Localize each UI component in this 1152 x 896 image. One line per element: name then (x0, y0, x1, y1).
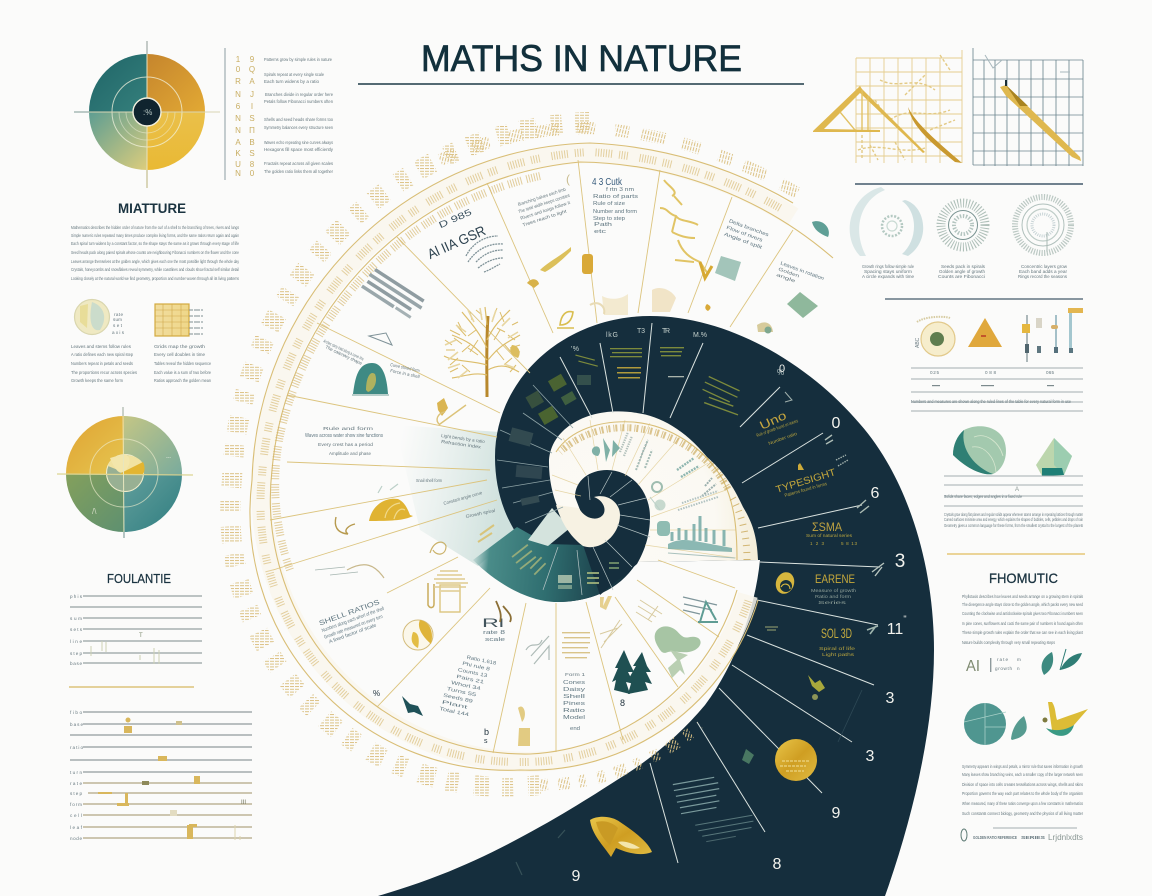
chart: lower rule list: ratio (70, 745, 83, 750)
panel content: top panels text: Ratio of parts (593, 194, 639, 200)
panel text: mist panel marks: Growth spiral (465, 508, 496, 519)
chart: lower rule list: cell (70, 813, 82, 818)
text block: small columns: Each value is a sum of two before (154, 370, 211, 375)
rings: outer glyph clusters (230, 122, 797, 787)
legend: gold glyph columns: I (251, 102, 253, 111)
heading: left lower: FOULANTIE (107, 571, 171, 586)
panel content: top panels text: ( (566, 172, 570, 186)
dark panels: green and pale glyphs: T3 (637, 328, 645, 335)
chart: upper rule list: T (139, 633, 143, 639)
text block: left upper paragraph: Leaves arrange themselves at the golden angle, which gives each one the most possible light through the whole day (71, 259, 239, 264)
numbers: dark band scale: 3 (895, 551, 905, 572)
icon row: AI label and leaves: growth (995, 666, 1012, 671)
legend: gold glyph columns: 1 (236, 55, 241, 64)
panel content: top right text and swatches: Flow of rivers (725, 225, 764, 244)
panel content: gold river branches (660, 180, 712, 278)
panel text: lower central blocks: rate 8 (483, 630, 505, 636)
panel text: lower central blocks: Shell (563, 694, 585, 700)
panel content: top right text and swatches: Golden (778, 266, 801, 279)
icon: teal leaf (1011, 716, 1027, 740)
table: right rule lines: Numbers and measures are shown along the ruled lines of the table for every natural form in use (911, 399, 1071, 404)
panel text: lower central blocks (439, 596, 718, 746)
panel text: lower central blocks: Model (563, 715, 585, 721)
footer: emblem and credits: Lrjdnlxdts (1048, 833, 1083, 842)
table: right rule lines: 065 (1046, 370, 1054, 375)
text block: left upper paragraph: Looking closely at the natural world we find geometry, proportion and number woven through all its living patterns (71, 276, 240, 281)
legend: description lines: The golden ratio links them all together (264, 169, 333, 174)
legend: description lines (264, 57, 334, 174)
text block: right paragraph 2: Many leaves show branching veins, each a smaller copy of the larger network seen (962, 772, 1083, 777)
dark panels: gold labels upper: Spiral of life (819, 646, 856, 651)
legend: gold glyph columns: K (235, 149, 241, 158)
text block: small columns: The proportions recur across species (71, 370, 138, 375)
dark panels: gold labels upper: Patterns found in forms (784, 481, 828, 498)
panel content: top panels text: Path (594, 222, 612, 228)
chart: lower rule list: turn (70, 770, 82, 775)
panel text: short rotated captions: Curve stored form (390, 362, 420, 373)
panel text: lower central blocks: end (570, 726, 580, 732)
legend: gold glyph columns: A (235, 138, 241, 147)
panel content: cream band charts (592, 432, 735, 558)
text: captions under patterns: Each band adds a year (1019, 269, 1067, 274)
panel text: short rotated captions: Rule and form (323, 426, 373, 431)
panel content: green plant (655, 626, 701, 678)
panel: three circular patterns (850, 187, 1071, 279)
icon: small pale circle with labels: rate (114, 312, 123, 317)
panel content: top right text and swatches: Leaves in rotation (779, 261, 825, 282)
panel text: short rotated captions: Refraction index (441, 439, 482, 450)
rule: right divider 1 (855, 183, 1083, 185)
panel content: teal arch (352, 363, 389, 395)
table: right rule lines: 088 (985, 370, 996, 375)
text block: small columns: Every cell doubles in time (154, 352, 205, 357)
text block: small columns: Leaves and stems follow rules (71, 344, 132, 349)
text: captions under patterns: A circle expands with time (862, 274, 914, 279)
legend: description lines: Petals follow Fibonacci numbers often (264, 99, 333, 104)
chart: upper rule list: line (70, 639, 82, 644)
panel content: top panels text: Rivers and lungs follow it (520, 200, 571, 221)
legend: gold glyph columns: S (249, 149, 255, 158)
panel content: top panels text: Number and form (593, 209, 637, 215)
icon: small pale circle with labels: sum (113, 317, 122, 322)
dark panels: gold labels upper: 5 8 13 (841, 541, 857, 546)
panel content: small dark glyphs: % (373, 689, 380, 698)
text block: right paragraph 1: Phyllotaxis describes how leaves and seeds arrange on a growing stem in spirals (962, 594, 1084, 599)
spiral: cream band (549, 411, 758, 562)
table: under-gem lines and text: Solids share faces, edges and angles in a fixed rule (944, 494, 1022, 499)
panel content: gold pagoda (428, 571, 468, 612)
panel text: short rotated captions: Light bends by a ratio (441, 433, 486, 444)
panel text: lower central blocks: Seeds 89 (443, 693, 474, 705)
numbers: dark band scale: 0 (832, 415, 841, 432)
footer: emblem and credits: SERIES (1021, 835, 1045, 840)
text: captions under patterns: Seeds pack in spirals (941, 264, 986, 269)
chart: upper rule list (70, 594, 202, 666)
dark panels: gold labels upper: Light paths (822, 652, 855, 657)
dark panels: gold labels upper: Series (818, 600, 847, 605)
panel: middle-left quadrant circle: /\ (92, 507, 97, 516)
footer: emblem and credits (961, 828, 1083, 842)
numbers: dark band scale: 9 (832, 805, 841, 822)
panel text: lower central blocks: Total 144 (439, 706, 470, 718)
panel content: gold and white disk (403, 620, 433, 650)
panel content: outlined triangle glyph (369, 333, 392, 345)
dark panels: gold labels upper: 1 2 3 (810, 541, 824, 546)
legend: gold glyph columns: N (235, 114, 241, 123)
icon: gold ring shell (773, 570, 797, 596)
panel: top-left quadrant circle (74, 41, 220, 188)
legend: description lines: Branches divide in regular order here (265, 92, 333, 97)
numbers: dark band scale: 9 (572, 868, 581, 885)
panel content: dark bird (402, 696, 423, 716)
icon: gold coin (775, 739, 817, 781)
panel text: mist panel marks (315, 478, 496, 578)
table: under-gem lines and text: A (1015, 487, 1019, 493)
icon: sunflower (941, 203, 985, 247)
chart: upper rule list: step (70, 651, 82, 656)
panel content: top panels text: Rule of size (593, 201, 625, 207)
numbers: dark band scale: 11 (887, 621, 903, 638)
legend: description lines: Fractals repeat across all given scales (264, 161, 334, 166)
icons: shapes and tools row: ABC (915, 337, 921, 348)
icon: gem (1036, 438, 1072, 476)
chart: lower rule list: fibo (70, 710, 82, 715)
panel text: short rotated captions (305, 338, 486, 456)
text: captions under patterns: Spacing stays uniform (864, 269, 912, 274)
radial dividers: cream band (552, 420, 736, 558)
icon: pale ring (850, 187, 923, 256)
panel content: top right text and swatches: angle (776, 272, 797, 284)
panel content: top panels text: etc (594, 229, 607, 235)
legend: gold glyph columns: 8 (250, 160, 255, 169)
panel content: top right text and swatches (715, 218, 825, 318)
text block: left upper paragraph: Each spiral turn widens by a constant factor, so the shape stays the same as it grows through every stage of life (71, 241, 239, 246)
panel text: teal block lower-left: A fixed factor of scale (328, 622, 377, 645)
chart: lower rule list: rate (70, 781, 82, 786)
legend: gold glyph columns: 0 (236, 65, 241, 74)
panel text: curved lines (466, 236, 503, 272)
dark panels: green and pale glyphs: TR (662, 328, 670, 335)
panel text: teal block lower-left: Growth rate measured on every turn (323, 614, 384, 641)
text: captions under patterns: Growth rings follow simple rule (862, 264, 914, 269)
panel text: short rotated captions: Amplitude and phase (329, 451, 371, 456)
panel content: top panels text (515, 172, 639, 235)
panel content: gold snail (335, 484, 413, 534)
text block: right paragraph 2: When measured, many of these ratios converge upon a few constants in mathematics (962, 801, 1083, 806)
panel text: lower central blocks: Pairs 21 (456, 674, 485, 686)
dark panels: green and pale glyphs (509, 328, 785, 506)
panel content: top panels text: 4 3 Cutk (592, 177, 623, 188)
icon: teal pie circle (964, 703, 1006, 745)
legend: gold glyph columns: 6 (236, 102, 241, 111)
text: captions under patterns: Rings record the seasons (1018, 274, 1068, 279)
text block: left upper paragraph: Mathematics describes the hidden order of nature from the curl of a shell to the branching of trees, rivers and lungs (71, 225, 240, 230)
panel: right grid pair (813, 48, 1083, 166)
rings: gold concentric lines (250, 143, 833, 770)
panel text: mist panel marks: Snail shell form (416, 478, 442, 483)
panel text: lower central blocks: scale (485, 637, 505, 643)
numbers: dark band scale: 3 (866, 748, 875, 765)
panel: middle-left quadrant circle (57, 407, 193, 538)
icon: small pale circle with labels: set (113, 323, 123, 328)
legend: description lines: Waves echo repeating sine curves always (264, 140, 334, 145)
dark panels: gold labels upper (756, 408, 857, 657)
rule: gold divider right (947, 553, 1085, 555)
text block: right paragraph 2: Proportion governs the way each part relates to the whole body of the organism (962, 791, 1083, 796)
panel content: tree (444, 307, 520, 397)
panel text: lower central blocks: Pines (563, 701, 586, 707)
legend: gold glyph columns: П (249, 126, 255, 135)
text block: right paragraph 1: In pine cones, sunflowers and cacti the same pair of numbers is found again often (962, 621, 1083, 626)
icon: ring pattern (1015, 197, 1071, 253)
heading: right lower: FHOMUTIC (989, 571, 1058, 586)
legend: gold glyph columns: U (235, 160, 241, 169)
numbers: dark band scale (572, 415, 907, 885)
text: captions under patterns: Counts are Fibonacci (938, 274, 985, 279)
legend: gold glyph columns: B (249, 138, 255, 147)
text block: right paragraph 1: The divergence angle stays close to the golden angle, which packs every new seed (962, 602, 1083, 607)
panel content: top panels text: The total width keeps constant (517, 193, 571, 214)
text block: left upper paragraph: Simple numeric rules repeated many times produce complex living forms, and the same ratios return again and again (71, 233, 239, 238)
text block: small columns: Numbers repeat in petals and seeds (71, 361, 134, 366)
text: captions under patterns: Golden angle of growth (939, 269, 985, 274)
legend: gold glyph columns: 9 (250, 55, 255, 64)
radial dividers: dark band (560, 323, 880, 863)
dark panels: green and pale glyphs: lkG (606, 332, 618, 339)
title: MATHS IN NATURE (421, 38, 742, 79)
panel text: dark glyphs (417, 205, 488, 262)
dark panels: green and pale glyphs: % (777, 368, 784, 377)
legend: gold glyph columns: J (250, 90, 254, 99)
panel text: lower central blocks: Cones (563, 680, 586, 686)
icon row: AI label and leaves: n (1017, 666, 1020, 671)
numbers: dark band scale: 6 (871, 485, 880, 502)
icon: gold grid table (155, 304, 203, 336)
chart: gold grid (813, 50, 962, 163)
text block: right paragraph 1 (962, 594, 1084, 645)
table: under-gem lines and text (944, 476, 1083, 528)
legend: description lines: Symmetry balances every structure seen (264, 125, 333, 130)
panel text: lower central blocks: Ratio 1.618 (466, 655, 497, 667)
text block: right paragraph 2: Division of space into cells creates tessellations across wings, shells and skins (962, 782, 1084, 787)
spiral: inner dark core (575, 470, 650, 595)
panel content: top panels text: Step to step (593, 216, 625, 222)
icon row: AI label and leaves: AI (966, 658, 980, 675)
legend: gold glyph columns: A (249, 77, 255, 86)
text: captions under patterns: Concentric layers grow (1021, 264, 1068, 269)
heading: left upper: MIATTURE (118, 201, 186, 216)
dark panels: green and pale glyphs: M.% (693, 332, 707, 339)
icon: small pale circle with labels: axis (112, 330, 125, 335)
dark panels: gold labels upper: Ratio and form (815, 594, 851, 599)
chart: upper rule list: phis (70, 594, 83, 599)
table: right rule lines: 025 (930, 370, 939, 375)
icon row: AI label and leaves: m (1017, 657, 1021, 662)
panel: top-left quadrant circle: :% (143, 108, 152, 117)
text block: small columns: Ratios approach the golden mean (154, 378, 211, 383)
panel text: lower central blocks: Counts 13 (457, 667, 488, 679)
text block: right paragraph 1: Counting the clockwise and anticlockwise spirals gives two Fibonacci numbers seen (962, 611, 1083, 616)
dark panels: gold labels upper: Measure of growth (811, 588, 857, 593)
legend: gold glyph columns: N (235, 90, 241, 99)
dark panels: bottom band labels in teal (512, 544, 619, 589)
spiral: teal gradient end of band (473, 527, 630, 602)
text block: small columns: Tables reveal the hidden sequence (154, 361, 211, 366)
footer: emblem and credits: GOLDEN RATIO REFERENCE (973, 835, 1017, 840)
legend: gold glyph columns: N (235, 169, 241, 178)
panel content: small dark glyphs: b (484, 727, 489, 737)
chart: navy grid (973, 48, 1083, 166)
dark panels: gold labels upper: SOL 3D (821, 625, 852, 641)
dark panels: green and pale glyphs: '% (571, 346, 579, 353)
spiral: pale mist panel (395, 425, 520, 566)
panel text: lower central blocks: Daisy (563, 687, 586, 693)
rings: gold outer band fill (261, 153, 793, 762)
panel text: teal block lower-left (318, 598, 389, 646)
chart: lower rule list (70, 710, 252, 841)
rings: hatched text band between rings (260, 152, 780, 762)
numbers: dark band scale: 3 (886, 690, 895, 707)
icon row: AI label and leaves: rate (997, 657, 1008, 662)
rule: top-left legend divider (224, 48, 226, 180)
radial dividers: outer panels (270, 160, 793, 753)
dark panels: gold labels upper: Uno (757, 408, 789, 433)
chart: upper rule list: base (70, 661, 82, 666)
panel text: short rotated captions: Arches carry load along a curve line (323, 338, 365, 362)
legend: description lines: Hexagons fill space most efficiently (264, 147, 334, 152)
legend: gold glyph columns: R (235, 77, 241, 86)
chart: lower rule list: node (70, 836, 82, 841)
panel text: lower central blocks: Whorl 34 (450, 680, 481, 692)
table: right rule lines (911, 368, 1083, 411)
chart: lower rule list: base (70, 722, 83, 727)
panel content: small dark glyphs: s (484, 738, 488, 745)
legend: gold glyph columns: 0 (250, 169, 255, 178)
legend: gold glyph columns (235, 55, 255, 178)
panel text: short rotated captions: The catenary shape (325, 344, 363, 366)
numbers: dark band scale: " (903, 614, 907, 624)
text block: left upper paragraph (71, 225, 240, 281)
panel text: lower central blocks: Turns 55 (446, 686, 477, 698)
panel content: small dark glyphs: 8 (620, 698, 625, 708)
icons: shapes and tools row (915, 308, 1083, 362)
text block: small columns: Grids map the growth (154, 344, 206, 349)
icon: teal cylinder (953, 426, 1006, 474)
chart: lower rule list: leaf (70, 825, 83, 830)
rule: gold divider left (69, 686, 194, 688)
icon: small pale circle with labels (74, 300, 125, 335)
teal patch at ring end (812, 221, 829, 237)
panel text: teal block lower-left: Numbers along each whorl of the shell (321, 606, 385, 634)
spiral: dark main band (378, 316, 934, 896)
panel content: top panels text: Branching halves each limb (517, 187, 567, 207)
text block: small columns: A ratio defines each new spiral step (71, 352, 133, 357)
legend: gold glyph columns: S (249, 114, 255, 123)
panel: middle-left quadrant circle: --- (166, 455, 171, 461)
panel content: top right text and swatches: Angle of split (723, 232, 764, 251)
panel text: lower central blocks: Ratio (563, 708, 585, 714)
panel content: small dark glyphs (373, 689, 625, 745)
panel text: lower central blocks: Rl (482, 616, 504, 630)
panel text: dark upper-left block (361, 267, 426, 321)
panel text: mist panel marks: Constant angle curve (443, 490, 483, 506)
panel content: gold small glyphs upper (437, 247, 773, 425)
dark panels: gold labels upper: TYPESIGHT (775, 467, 837, 496)
dark panels: lower glyphs (516, 392, 884, 875)
chart: upper rule list: sum (70, 616, 82, 621)
dark panels: green and pale glyphs: 0 (779, 363, 785, 375)
text block: small columns: Growth keeps the same form (71, 378, 123, 383)
icon: gold dish (590, 817, 652, 857)
legend: description lines: Shells and seed heads share forms too (264, 117, 333, 122)
panel text: teal block lower-left: SHELL RATIOS (318, 599, 381, 628)
text block: right paragraph 2: Symmetry appears in wings and petals, a mirror rule that saves information in growth (962, 764, 1083, 769)
panel text: lower central blocks: Form 1 (565, 672, 586, 677)
chart: upper rule list: sets (70, 627, 83, 632)
spiral: pale wedge (528, 508, 570, 546)
panel content: forest (612, 650, 652, 694)
rule: right divider 2 (885, 298, 1083, 300)
panel text: dark glyphs: Al IIA GSR (425, 222, 488, 262)
spiral: cream arm (556, 496, 620, 547)
panel text: dark glyphs: D 985 (437, 207, 473, 230)
panel text: short rotated captions: Every crest has a period (318, 442, 373, 447)
panel text: lower central blocks: Phi rule 8 (462, 661, 491, 673)
legend: gold glyph columns: N (235, 126, 241, 135)
text block: right paragraph 2 (962, 764, 1084, 816)
panel content: top right text and swatches: Delta branches (728, 218, 770, 239)
legend: description lines: Patterns grow by simple rules in nature (264, 57, 332, 62)
panel content: top panels text: f rtn 3 nm (606, 187, 634, 193)
panel text: short rotated captions: Waves across water show sine functions (305, 433, 383, 439)
dark panels: gold labels upper: Sum of natural series (806, 533, 853, 538)
panel content: top panels text: Trees reach to light (522, 208, 568, 228)
dark panels: gold labels upper: Rule of growth found on leaves (756, 418, 799, 438)
chart: lower rule list: III (241, 800, 246, 806)
text block: right paragraph 2: Such constants connect biology, geometry and the physics of all living matter (962, 811, 1083, 816)
panel text: short rotated captions: Force in a shell (390, 368, 420, 379)
text block: left upper paragraph: Seed heads pack along paired spirals whose counts are neighbouring Fibonacci numbers on the flower and the cone (71, 250, 239, 255)
chart: lower rule list: step (70, 791, 82, 796)
text: captions under patterns (862, 264, 1068, 279)
legend: description lines: Each turn widens by a ratio (264, 79, 319, 84)
text block: small columns (71, 344, 211, 383)
text block: right paragraph 1: Nature builds complexity through very small repeating steps (962, 640, 1056, 645)
text block: right paragraph 1: These simple growth rules explain the order that we can see in each living plant (962, 630, 1084, 635)
numbers: dark band scale: 8 (773, 856, 782, 873)
text block: left upper paragraph: Crystals, honeycombs and snowflakes reveal symmetry, while coastlines and clouds show fractal self similar detail (71, 267, 239, 272)
legend: gold glyph columns: Q (249, 65, 255, 74)
dark panels: gold labels upper: ΣSMA (812, 520, 842, 534)
dark panels: gold labels upper: Number ratio (768, 431, 798, 446)
icon: butterfly (1042, 702, 1088, 736)
dark panels: gold labels upper: EARENE (815, 572, 855, 586)
legend: description lines: Spirals repeat at every single scale (264, 72, 324, 77)
chart: lower rule list: form (70, 802, 82, 807)
icon row: AI label and leaves (966, 649, 1082, 675)
panel text: lower central blocks: Plant (441, 699, 469, 711)
